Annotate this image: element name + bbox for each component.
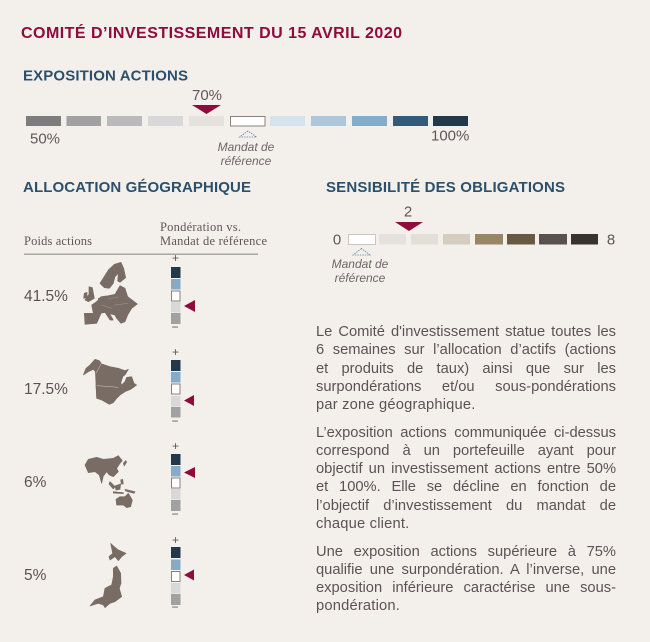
row: amérique du nord <box>24 345 194 428</box>
scale label: 8: 8 <box>607 232 615 248</box>
weighting stack: − <box>171 507 179 521</box>
text block: exposition: correspond à un portefeuille ayant pour <box>316 443 616 459</box>
map: europe <box>84 262 137 324</box>
value: 41.5%: 41.5% <box>24 288 68 305</box>
text block: surpondération: pondération. <box>316 598 400 614</box>
map: japan <box>90 543 126 608</box>
marker arrow <box>184 300 195 312</box>
text block: comité: Le Comité d'investissement statue toutes les <box>316 324 616 340</box>
marker arrow <box>184 467 195 478</box>
scale segments <box>26 116 468 126</box>
row: japon <box>24 533 194 614</box>
weighting stack <box>171 439 180 521</box>
heading: allocation géographique: ALLOCATION GÉOGRAPHIQUE <box>23 179 251 196</box>
column header: poids actions: Poids actions <box>24 234 92 248</box>
text block: surpondération: Une exposition actions supérieure à 75% <box>316 544 616 560</box>
gauge: exposition actions <box>26 87 469 168</box>
weighting stack: + <box>172 345 179 359</box>
weighting stack: + <box>172 439 179 453</box>
scale label: 100%: 100% <box>431 128 469 144</box>
heading: exposition actions: EXPOSITION ACTIONS <box>23 68 188 84</box>
reference label: Mandat de <box>332 257 389 271</box>
heading: sensibilité des obligations: SENSIBILITÉ DES OBLIGATIONS <box>326 179 565 196</box>
row: asie pacifique <box>24 439 195 521</box>
marker arrow <box>184 570 194 580</box>
reference marker <box>240 131 256 137</box>
scale label: 50%: 50% <box>30 130 60 148</box>
weighting stack <box>171 345 180 428</box>
gauge: sensibilité des obligations <box>332 204 615 285</box>
text block: exposition: et 100%. Elle se décline en fonction de <box>316 479 616 495</box>
map: north america <box>83 359 137 404</box>
value: 17.5%: 17.5% <box>24 381 68 398</box>
text block: comité: 6 semaines sur l’allocation d’actifs (actions <box>316 342 616 358</box>
reference label: Mandat de <box>218 140 275 154</box>
weighting stack <box>171 533 180 614</box>
map: asia pacific <box>85 456 135 508</box>
value label: 2: 2 <box>404 204 412 220</box>
marker arrow: 2 <box>395 222 423 231</box>
row: europe <box>24 251 195 334</box>
marker arrow: 70% <box>192 105 221 114</box>
text block: comité: par zone géographique. <box>316 397 476 413</box>
column header: pondération: Pondération vs. <box>160 220 241 234</box>
marker arrow <box>184 395 194 406</box>
weighting stack: + <box>172 533 179 547</box>
scale segments <box>348 234 598 244</box>
text block: exposition: L’exposition actions communiquée ci-dessus <box>316 424 616 440</box>
text block: exposition: l’objectif d’investissement du mandat de <box>316 498 616 514</box>
text block: exposition: objectif un investissement actions entre 50% <box>316 461 616 477</box>
weighting stack: − <box>171 320 179 334</box>
text block: surpondération: qualifie une surpondération. A l’inverse, une <box>316 562 616 578</box>
text block: comité: surpondérations et/ou sous-pondérations <box>316 379 616 395</box>
value: 5%: 5% <box>24 567 47 584</box>
text block: surpondération: exposition inférieure caractérise une sous- <box>316 580 616 596</box>
text block: comité <box>316 324 616 413</box>
scale label: 0: 0 <box>333 232 341 248</box>
weighting stack: + <box>172 251 179 265</box>
column header: pondération: Mandat de référence <box>160 234 267 248</box>
weighting stack: − <box>171 600 179 614</box>
text block: surpondération <box>316 544 616 614</box>
title: COMITÉ D’INVESTISSEMENT DU 15 AVRIL 2020 <box>21 23 402 42</box>
reference label: référence <box>221 154 272 168</box>
value: 6%: 6% <box>24 474 47 491</box>
weighting stack <box>171 251 180 334</box>
reference marker <box>353 248 370 255</box>
reference label: référence <box>335 271 386 285</box>
weighting stack: − <box>171 414 179 428</box>
value label: 70%: 70% <box>192 87 222 104</box>
text block: comité: et produits de taux) ainsi que sur les <box>316 361 616 377</box>
text block: exposition <box>316 424 616 532</box>
text block: exposition: chaque client. <box>316 516 409 532</box>
